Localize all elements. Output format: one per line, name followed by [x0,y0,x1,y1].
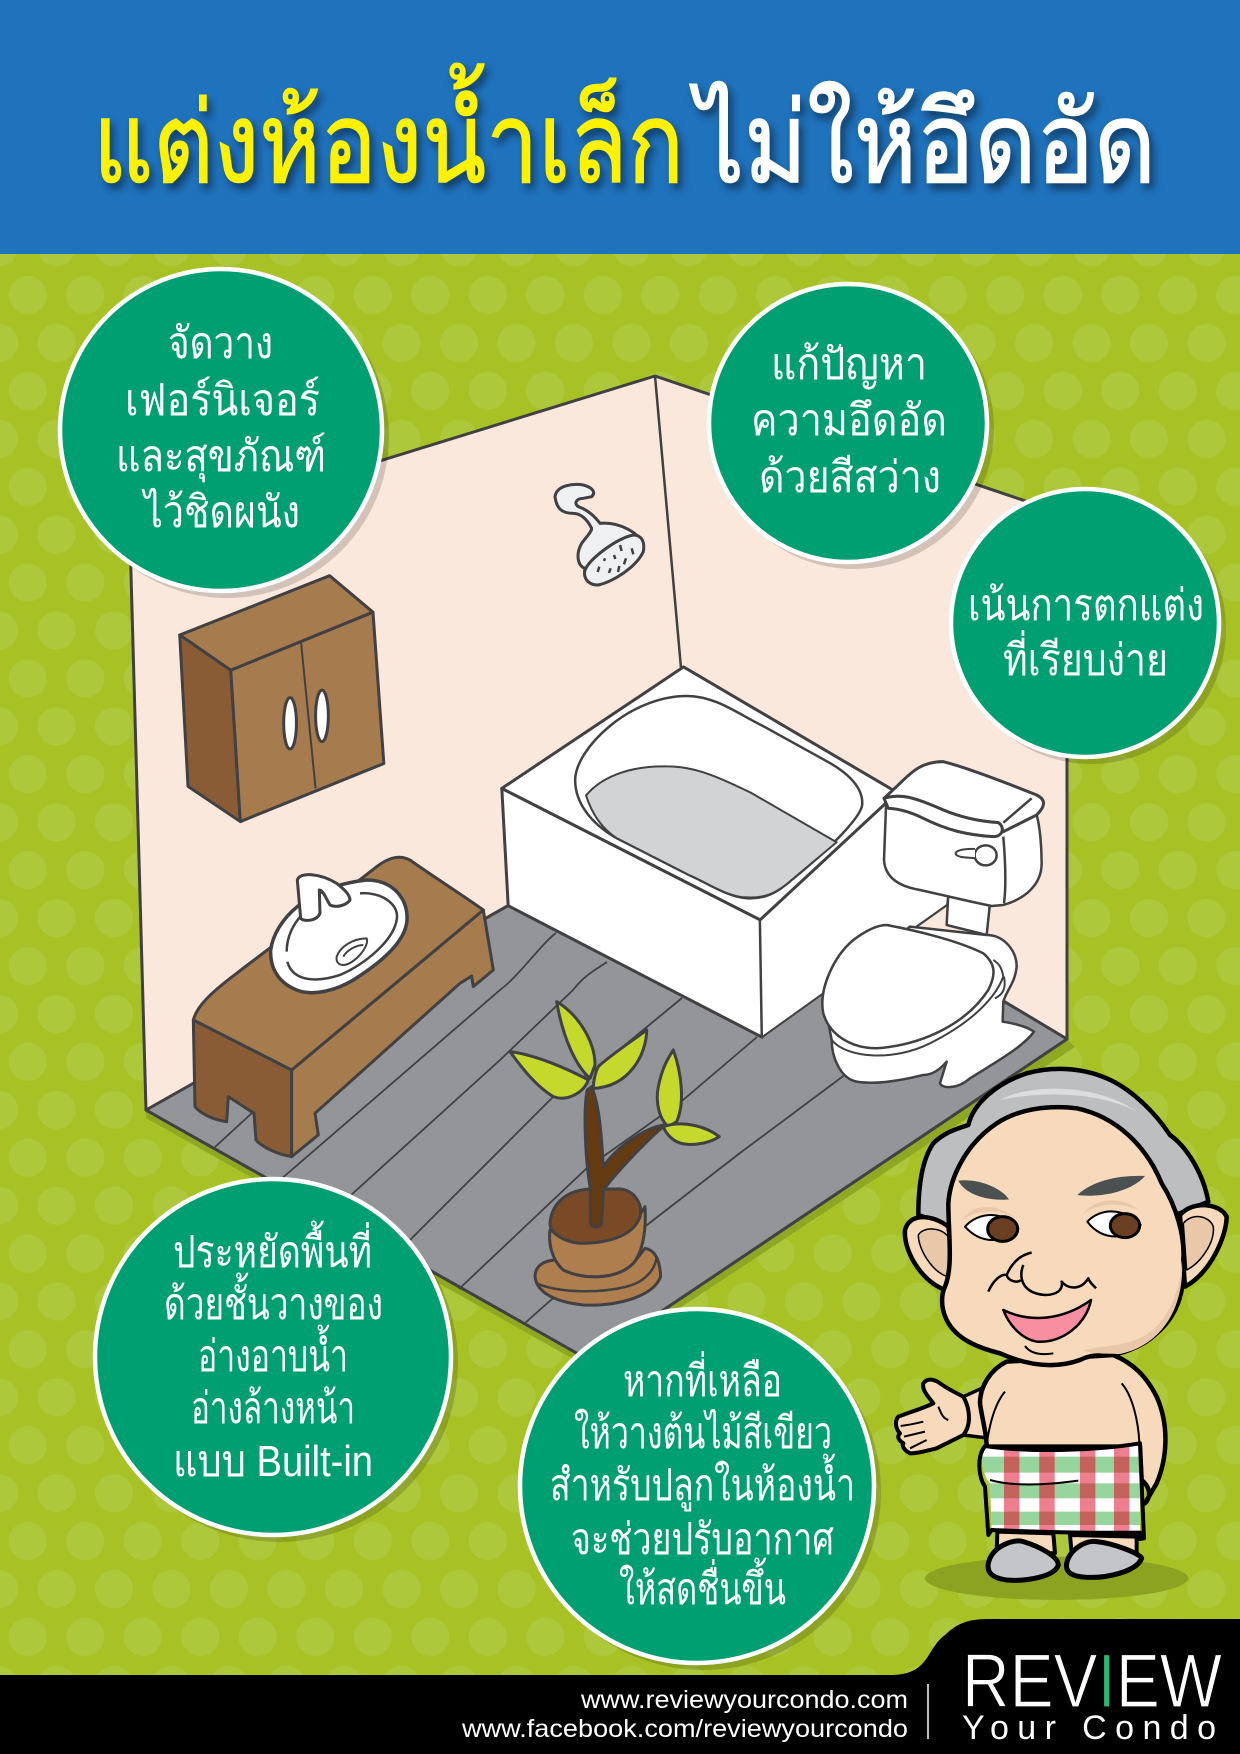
callout: green plants: จะช่วยปรับอากาศ [571,1515,834,1564]
torso [980,1355,1165,1503]
room walls [130,376,1067,1360]
callout: built-in shelves: แบบ Built-in [173,1437,373,1486]
checked sarong [982,1446,1140,1531]
callout: bright colours [709,284,994,569]
man head [905,1069,1227,1365]
logo: Review Your Condo: Your Condo [962,1709,1216,1747]
callout: built-in shelves: ประหยัดพื้นที่ [173,1220,372,1277]
callout: arrange furniture against the wall: จัดวาง [168,319,273,368]
header band [0,0,1240,254]
ground shadow [925,1557,1188,1600]
callout: built-in shelves [95,1179,458,1542]
upper arm [963,1388,990,1438]
title [93,63,1156,206]
character: cartoon man [896,1069,1227,1600]
icon: shower head [555,484,644,585]
callout: arrange furniture against the wall [60,269,389,598]
legs [997,1532,1055,1553]
nose and smile lines [988,1253,1096,1295]
title: แต่งห้องน้ำเล็ก [93,63,684,206]
callout: arrange furniture against the wall: ไว้ชิดผนัง [141,487,300,537]
hand [896,1380,969,1453]
hair [918,1069,1208,1227]
footer bar with logo tab [0,1619,1240,1754]
floor planks [215,933,846,1323]
callout: built-in shelves: อ่างอาบน้ำ [198,1324,348,1381]
ears [905,1217,953,1290]
callout: bright colours: แก้ปัญหา [771,340,927,389]
callout: simple decoration [951,489,1226,764]
mouth [1003,1300,1091,1342]
callout: green plants: ให้สดชื่นขึ้น [619,1557,786,1614]
icon: bathtub [502,667,958,1037]
callout: bright colours: ความอึดอัด [751,396,947,445]
icon: potted plant [510,1002,719,1305]
callout: arrange furniture against the wall: เฟอร์นิเจอร์ [125,376,320,425]
floor shadow [146,1039,1075,1368]
face [942,1107,1184,1365]
logo: Review Your Condo: REVIEW [962,1639,1222,1724]
callout: bright colours: ด้วยสีสว่าง [759,453,941,502]
feet [988,1541,1058,1580]
callout: green plants [520,1309,881,1670]
title: ไม่ให้อึดอัด [689,81,1156,206]
callout: arrange furniture against the wall: และสุขภัณฑ์ [116,432,326,483]
eyes [965,1215,1018,1240]
callout: built-in shelves: อ่างล้างหน้า [191,1384,355,1433]
callout: built-in shelves: ด้วยชั้นวางของ [164,1272,383,1329]
saucer [535,1248,661,1305]
pot [550,1207,645,1277]
website links: www.reviewyourcondo.com [580,1686,908,1714]
room illustration [130,376,1075,1368]
footer divider [927,1684,929,1739]
icon: sink vanity [193,857,493,1157]
callout: green plants: หากที่เหลือ [623,1350,782,1406]
website links: www.facebook.com/reviewyourcondo [461,1715,908,1743]
website links [461,1686,908,1743]
room floor [146,808,1067,1360]
man body [896,1355,1188,1600]
wall corner line [655,376,681,668]
eyebrows [958,1180,1009,1200]
callout: green plants: สำหรับปลูกในห้องน้ำ [550,1453,855,1512]
stem [585,1087,665,1227]
callout: green plants: ให้วางต้นไม้สีเขียว [574,1408,832,1458]
callout: simple decoration: ที่เรียบง่าย [1003,629,1168,685]
icon: toilet [822,762,1044,1087]
leaves [557,1002,595,1078]
icon: wall cabinet [180,576,384,822]
